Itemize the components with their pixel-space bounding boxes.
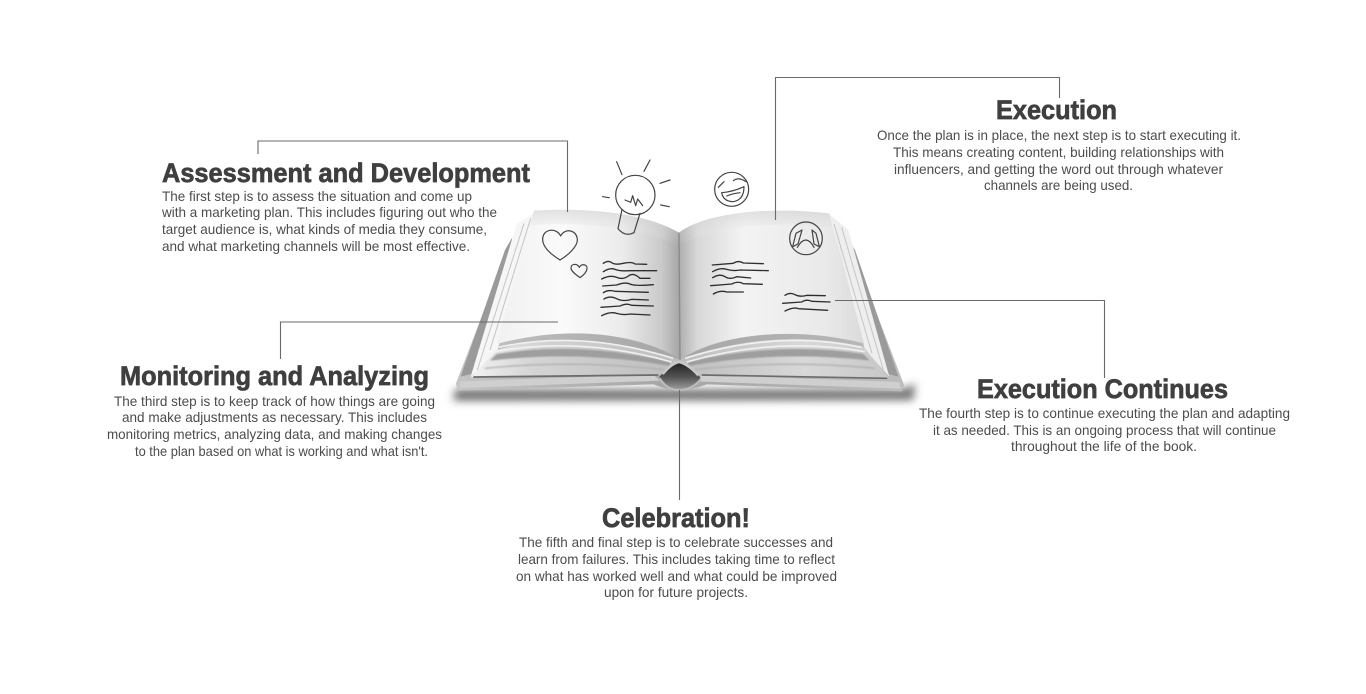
connector line	[280, 322, 558, 359]
panel: execution	[776, 78, 1241, 220]
icon: crying face	[790, 222, 822, 255]
scribble text left page	[601, 261, 657, 316]
body text: The third step is to keep track of how things are going	[114, 393, 435, 409]
book cover	[456, 238, 904, 391]
body text: throughout the life of the book.	[1011, 438, 1197, 454]
body text	[516, 534, 837, 600]
body text: on what has worked well and what could be improved	[516, 568, 837, 584]
centre gutter	[679, 233, 680, 360]
body text	[161, 188, 497, 254]
panel: assessment and development	[161, 141, 568, 254]
page edge stripes	[485, 349, 875, 370]
body text	[919, 405, 1290, 454]
body text: it as needed. This is an ongoing process that will continue	[933, 422, 1276, 438]
right page	[679, 211, 864, 359]
heading: Execution	[996, 95, 1117, 125]
body text: and what marketing channels will be most effective.	[162, 238, 470, 254]
body text: with a marketing plan. This includes figuring out who the	[161, 204, 497, 220]
cover bottom edge highlight	[460, 375, 901, 389]
body text: to the plan based on what is working and what isn't.	[135, 443, 428, 459]
body text: Once the plan is in place, the next step is to start executing it.	[877, 127, 1241, 143]
body text: influencers, and getting the word out through whatever	[894, 161, 1223, 177]
heading: Monitoring and Analyzing	[120, 361, 429, 391]
body text: target audience is, what kinds of media they consume,	[162, 221, 487, 237]
icon: small heart	[571, 264, 587, 278]
flyleaf edges	[471, 213, 533, 377]
connector line	[258, 141, 568, 212]
body text: and make adjustments as necessary. This includes	[122, 409, 427, 425]
spine headband	[659, 362, 701, 390]
body text: learn from failures. This includes taking time to reflect	[518, 551, 835, 567]
body text: The fifth and final step is to celebrate successes and	[519, 534, 833, 550]
scribble text right page	[711, 262, 768, 294]
body text: channels are being used.	[984, 177, 1133, 193]
page block left	[471, 340, 679, 377]
body text: upon for future projects.	[604, 584, 748, 600]
page block bottom line	[473, 375, 887, 378]
page top shading	[530, 210, 833, 247]
heading: Celebration!	[602, 503, 750, 533]
heading: Execution Continues	[977, 374, 1228, 404]
panel: celebration	[516, 390, 837, 600]
book shadow	[453, 383, 915, 401]
book illustration	[453, 160, 915, 401]
body text	[107, 393, 442, 459]
icon: large heart	[543, 230, 577, 260]
heading: Assessment and Development	[162, 158, 530, 188]
cover side darker strips	[461, 238, 898, 377]
page block right	[679, 339, 889, 379]
body text	[877, 127, 1241, 193]
connector line	[776, 78, 1060, 220]
connector line	[678, 390, 680, 500]
scribble note right page	[783, 293, 830, 311]
left page	[497, 210, 681, 359]
panel: monitoring and analyzing	[107, 322, 558, 459]
body text: monitoring metrics, analyzing data, and making changes	[107, 426, 442, 442]
panel: execution continues	[835, 300, 1290, 454]
icon: laughing face	[715, 172, 749, 206]
body text: This means creating content, building relationships with	[893, 144, 1224, 160]
page edge highlights	[495, 340, 865, 362]
connector line	[835, 300, 1104, 378]
body text: The first step is to assess the situation and come up	[162, 188, 472, 204]
body text: The fourth step is to continue executing the plan and adapting	[919, 405, 1290, 421]
icon: light bulb	[603, 160, 670, 234]
